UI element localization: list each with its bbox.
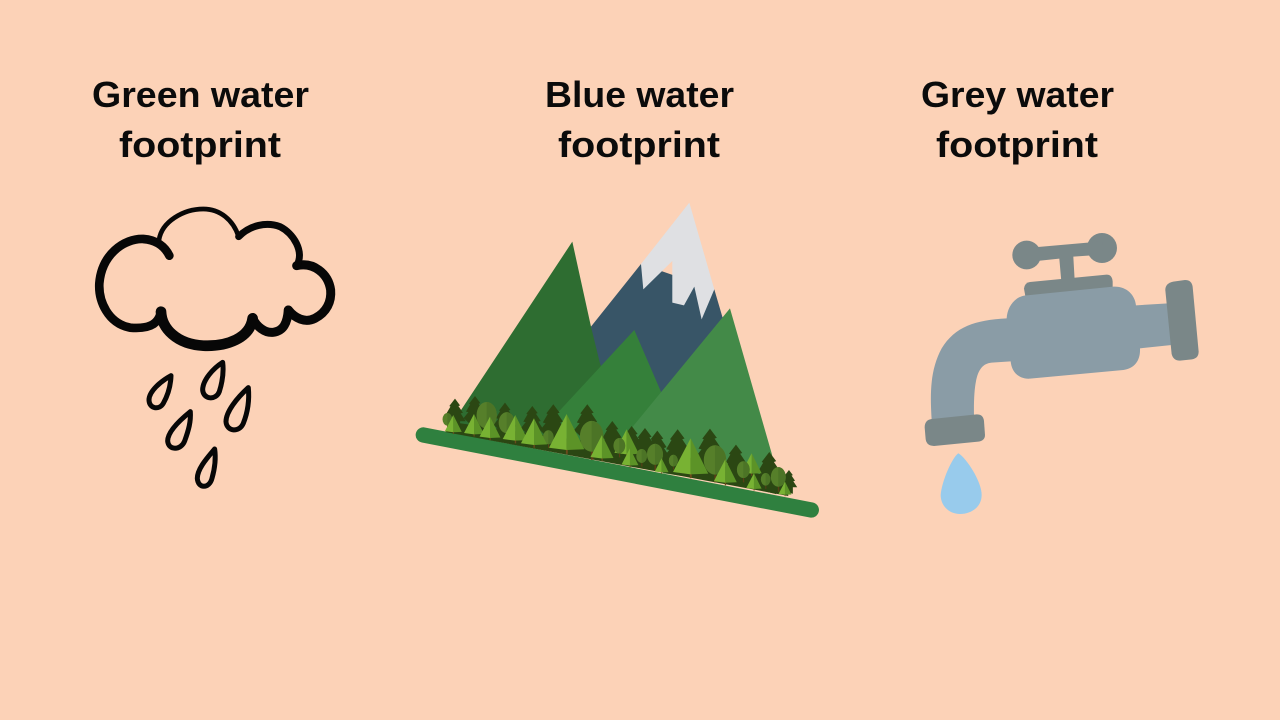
heading: grey water footprint: footprint: [936, 124, 1098, 165]
middle green mountain: [543, 330, 677, 463]
spout and body: [931, 287, 1172, 420]
heading: grey water footprint: [921, 74, 1114, 165]
heading: green water footprint: [92, 74, 309, 165]
ground strip: [423, 435, 811, 510]
heading: grey water footprint: Grey water: [921, 74, 1114, 115]
water drop: [941, 453, 982, 514]
cloud outline: [99, 209, 331, 346]
icon: rain cloud: [99, 209, 331, 486]
icon: water tap: [925, 233, 1199, 514]
forest: [443, 396, 797, 496]
heading: blue water footprint: footprint: [558, 124, 720, 165]
tap handle: [1012, 233, 1117, 296]
snow cap: [641, 203, 714, 319]
tap outlet flange: [1165, 280, 1199, 361]
heading: green water footprint: Green water: [92, 74, 309, 115]
heading: blue water footprint: Blue water: [545, 74, 734, 115]
heading: blue water footprint: [545, 74, 734, 165]
spout nozzle: [925, 414, 985, 446]
light green mountain: [630, 308, 780, 490]
dark green mountain: [447, 242, 623, 457]
rain drops: [149, 362, 249, 486]
icon: mountains and forest: [423, 203, 811, 510]
blue mountain: [591, 264, 727, 403]
heading: green water footprint: footprint: [119, 124, 281, 165]
